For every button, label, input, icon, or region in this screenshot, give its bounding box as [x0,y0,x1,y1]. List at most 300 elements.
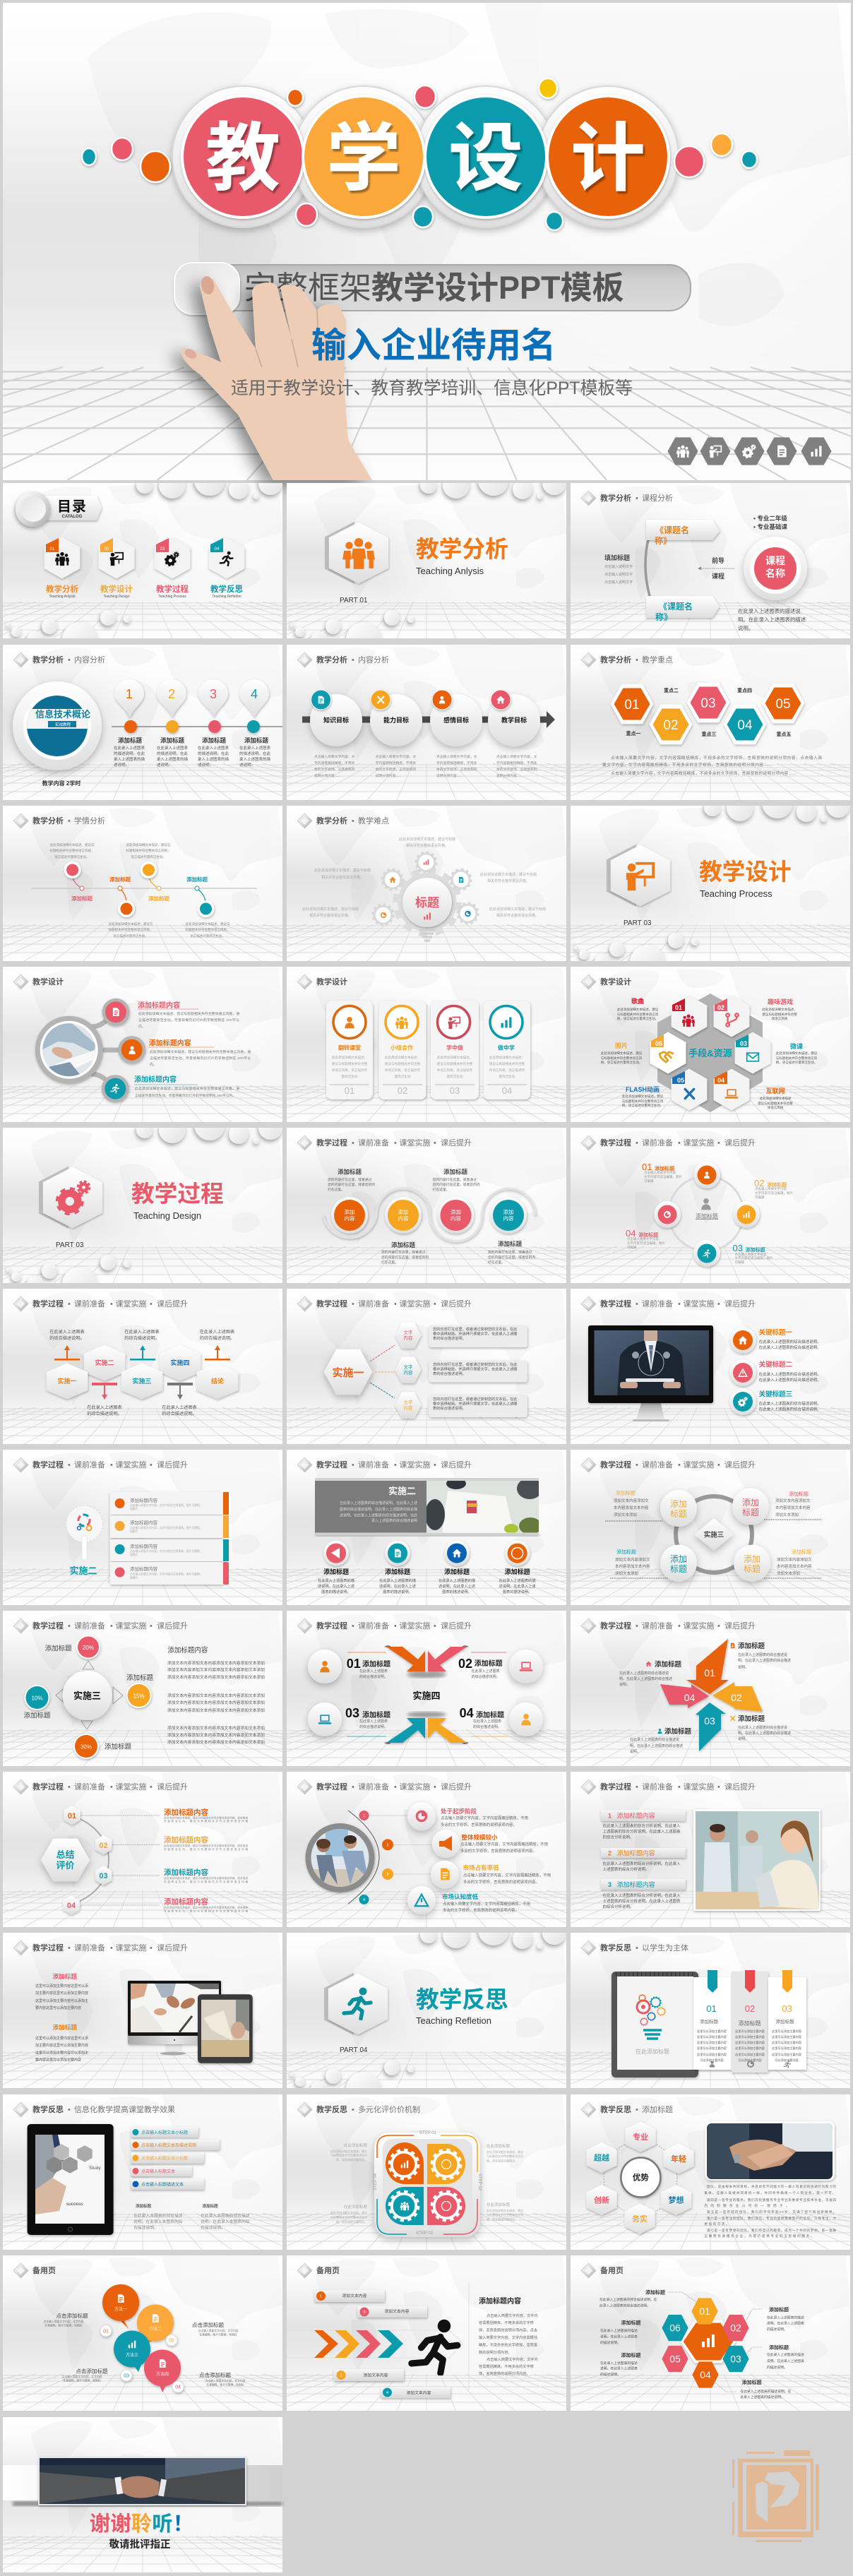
background [0,645,410,800]
thank you text: 谢谢聆听！ [90,2512,193,2536]
list item 4: 市场认知度低 [442,1893,479,1900]
slide header: • [636,1461,638,1469]
text bottom left: 添加文本内容添加文 [615,1556,650,1562]
resource descriptions: 格，语言描述尽量简洁生动。 [617,1016,658,1021]
slide header: • [352,817,354,825]
slide: implementation three percent [0,1611,410,1766]
hex 03: 03 [99,1872,108,1880]
key point labels: 重点二 [664,687,679,693]
slide header: • [434,1461,436,1469]
item text 3: 添加标题内容 [164,1868,208,1877]
arrow descriptions: 的综合描述说明。 [162,1411,197,1417]
card 1: 建议与标题相关并符合整 [332,1061,368,1066]
slide: cycle ring [443,1128,853,1283]
gear descriptions: 相关并符合整体语言风格。 [496,913,539,918]
label 04: 文字内容可适当编辑，图片 [627,1241,665,1246]
node bottom right: 标题 [744,1564,760,1574]
caption block 1: 添加标题 [136,2203,151,2209]
hex nodes: 超越 [594,2153,609,2163]
info card 2 [429,1360,527,1383]
right paragraphs: 添加文本内容添加文本内容添加文本内容添加文本添加 [167,1700,265,1705]
center diamond: 实施三 [704,1531,724,1539]
side captions right [487,2143,523,2222]
catalog item 3 [155,537,190,599]
column 2: 这里可以添加主要内容 [735,2040,765,2045]
item 03 [308,1703,390,1736]
slide header: 课前准备 [74,1943,105,1952]
hex 01: 01 [68,1812,76,1820]
slide header [13,2263,56,2278]
dashed ring [604,2141,677,2214]
column 2: 这里可以添加主要内容 [735,2029,765,2034]
column 1: 01 [706,2003,717,2014]
list item 3: 点击输入简要文字内容，文字内容需概括精炼，不用 [463,1873,551,1878]
label 02: 添加标题 [738,1715,765,1723]
node bottom right [734,1545,770,1582]
item text 4: 此处添加详细文本描述，建议与标题相关并符合整体语言风格，语言描述 [164,1905,248,1909]
item 04: 在此录入上述图表 [473,1719,501,1724]
slide: pinwheel arrows [443,1611,853,1766]
numbered dots [359,1811,393,1904]
list item 3: 上述图表的综合分析说明。在此录入上述图表 [603,1898,681,1904]
item text 1: 尽量简洁生动。建议与标题相关并符合整体语言风格 [164,1819,248,1823]
label 03: 点击输入简要文字内容, [734,1252,768,1257]
bullet list: • 专业二年级 [753,515,787,522]
paragraphs: 正确而优质服务企业，为客户提供专业的五星级的服务。 [705,2234,813,2238]
goal descriptions: 说明分项内容...... [496,773,523,778]
info card 2: 您的内容打在这里，或者通过复制您的文本后，在此 [433,1361,518,1367]
list row 3: 添加标题内容 [130,1543,158,1549]
hexagon 05 [762,684,804,723]
slide header: 教学分析 [600,656,631,664]
goal descriptions: 余的文字修饰，言简意赅的 [496,767,537,772]
number badges: 02 [169,2339,174,2343]
pin captions: 录入上述图表的描 [198,756,229,762]
label 03: 03 添加标题 [733,1243,765,1253]
summary hexagon: 评价 [56,1860,75,1871]
hexagon 01 [611,684,653,724]
slide header: • [678,1139,681,1147]
slide header: 课前准备 [358,1299,389,1308]
item text 4: 尽量简洁生动。建议与标题相关并符合整体语言风格 [164,1909,248,1912]
feature 3: 述说明。在此录入上述 [439,1583,475,1589]
paragraphs: 第四是一名专业的服务。我们的优质服务专业专业形象受专业技术水准，丰富四 [707,2198,836,2202]
node 2 [140,861,161,890]
slide header: 课前准备 [358,1782,389,1791]
paragraphs: 集体。这群人既被共同目标一样，共同条件确保一个人的业务，第一不可。 [705,2190,836,2195]
slide: course analysis [443,483,853,638]
slide header: 课堂实施 [684,1138,715,1147]
arrow descriptions: 在此录入上述图表 [87,1405,122,1410]
caption block 2: 说明。在此录入本图表的综 [201,2219,250,2224]
section hexagon [325,522,388,584]
catalog item 2: 教学设计 [100,584,133,594]
bubble caption 1: 任意编辑，图片可替换，纯图标 [44,2323,83,2327]
arrow descriptions [49,1329,234,1417]
slide header: • [68,1622,71,1630]
bullet list: • 专业基础课 [753,523,787,530]
info card 1: 您的内容打在这里，或者通过复制您的文本后，在此 [433,1326,518,1332]
title rings [172,86,679,227]
branch text teal: 言描述尽量简洁生动。尽量将每页幻灯片的字数控制在 200字以内。 [135,1093,236,1098]
step tag 2: 2 [340,2374,342,2378]
label 03: 添加标题 [664,1727,692,1736]
gear descriptions: 相关并符合整体语言风格。 [487,878,530,883]
slide header: 课后提升 [157,1943,188,1952]
card 2: 建议与标题相关并符合整 [385,1061,421,1066]
description blocks: 标题相关并符合整体语言风格， [109,927,153,932]
bubble caption 2: 任意编辑，图片可替换，纯图标 [199,2333,237,2336]
gray shadows [384,1645,469,1744]
list item 1: 1 [608,1812,612,1819]
slide header: 课后提升 [441,1621,472,1630]
hexagon 05: 05 [775,697,791,712]
background [0,1128,410,1283]
node 4 [195,886,215,917]
part label: PART 01 [340,597,368,604]
slide header: 教学设计 [316,977,347,986]
percent 30 [73,1734,99,1759]
side captions right: 格，语言描述尽量简洁。 [487,2158,518,2162]
center circle: 优势 [633,2172,649,2182]
slide: method cards [160,967,693,1122]
pin captions: 录入上述图表的描 [239,756,271,762]
hexagon 03: 03 [700,696,716,711]
notebook [612,1972,698,2077]
node 1 [64,861,84,890]
node labels: 添加标题 [186,876,208,883]
background [160,806,693,961]
background [443,967,853,1122]
item 03: 添加标题 [362,1710,390,1719]
text block 1: 加主要内容这里可以添加主要内容 [35,1991,88,1996]
hex 05 [672,1069,707,1110]
keyword 1: 在此录入上述图表的综合描述说明。 [759,1339,821,1344]
divider [108,1493,109,1584]
card 2: 此处添加详细文本描述， [385,1055,420,1060]
pin captions: 添加标题 [244,737,268,744]
slide: learner analysis timeline [0,806,410,961]
label 01: 在此录入上述图表的综合描述说 [738,1652,787,1657]
resource descriptions: 建议与标题相关并符合整 [758,1101,793,1106]
item 04: 04 [460,1706,474,1720]
background [0,483,410,638]
node bottom left: 添加 [670,1554,687,1564]
step labels: STEP 03 [416,2231,434,2236]
gear descriptions: 相关并符合整体语言风格。 [309,913,352,918]
text bottom left: 添加文本添加 [615,1570,638,1576]
card 1 [326,1001,373,1099]
column 3 [768,1970,806,2070]
gray core hexagon [657,994,763,1112]
step descriptions: 您的内容打在这里，或者通过 [488,1250,532,1254]
course name circle: 课程 [765,555,785,566]
slide: catalog [0,465,410,657]
label 01: 点击输入简要文字内容, [644,1170,676,1175]
text top right: 添加文本添加 [775,1512,799,1517]
column 2: 可以添加主要内容 [738,2058,762,2063]
prerequisite arrow: 课程 [712,572,724,580]
summary hexagon [41,1839,90,1881]
t-arrows down [92,1383,193,1400]
item 03: 03 [345,1706,359,1720]
slide header [581,1618,756,1633]
keyword 3: 在此录入上述图表的综合描述说明。 [759,1401,821,1407]
background [443,806,853,961]
list item 4 [407,1886,530,1914]
slide header: 课堂实施 [116,1460,147,1469]
label 01: 明。在此录入上述图表的综合描述 [738,1658,791,1663]
feature 4: 在此录入上述图表的描 [499,1578,536,1583]
slide header: 教学分析 [32,656,64,664]
part label: PART 03 [624,919,652,927]
hex 03 [735,1032,770,1073]
divider line [468,2283,470,2390]
step captions: 添加标题 [498,1240,522,1247]
banner panel: 实施二 [388,1486,416,1496]
background [443,1289,853,1444]
resource descriptions: 格，语言描述尽量简洁生动。 [622,1103,663,1108]
title circle: 学 [302,95,426,219]
slide header [13,1779,188,1794]
slide header: • [110,1783,113,1791]
hex 02: 02 [717,1004,724,1011]
feature 1: 添加标题 [323,1568,349,1575]
slide header: 备用页 [32,2265,56,2275]
slide header: 课堂实施 [400,1299,431,1308]
list row 4: 点击输入简要文字内容。文字内容应言简意赅。图片可替换。 [130,1572,203,1576]
goal descriptions: 字内容需概括精炼，不用多 [376,761,416,765]
pin captions: 的描述说明。在此 [198,751,229,756]
pin captions: 述说明。 [239,762,255,768]
label 01: 01 添加标题 [642,1162,674,1172]
resource titles: 互联网 [765,1087,785,1095]
slide header: • [110,1300,113,1308]
slide header: • [636,1139,638,1147]
title circle: 计 [546,95,670,219]
desktop monitor [128,1981,221,2055]
slide header: 课程分析 [642,493,673,503]
background [0,1450,410,1605]
node top left: 添加 [670,1499,687,1509]
small hex 1: 文字 [404,1329,413,1335]
step circle 3: 内容 [451,1215,461,1222]
slide header: 教学设计 [32,977,64,986]
paragraphs: 团队，是由根本共同目标、并且具有不同能力的一群人有意识的协调行为和力的 [707,2184,836,2189]
branch text red: 添加标题内容 [138,1001,180,1010]
goal circle 2 [370,690,422,746]
column 2: 这里可以添加主要内容 [735,2052,765,2057]
gear descriptions: 相关并符合整体语言风格。 [406,843,448,848]
catalog item 3: 教学过程 [156,584,189,594]
arrow descriptions: 的综合描述说明。 [49,1335,85,1341]
bubble 4 [144,2350,181,2392]
goal descriptions: 点击输入简要文字内容，文 [496,754,537,759]
resource descriptions: 与标题相关并符合整体语言风 [622,1099,664,1104]
goal descriptions: 点击输入简要文字内容，文 [314,754,355,759]
rounded frame [374,2133,480,2237]
slide header: • [636,1783,638,1791]
card 2: 量简洁生动 [395,1074,411,1079]
slide header [13,974,64,989]
label 01: 添加标题 [738,1642,765,1650]
slide header: 课堂实施 [116,1621,147,1630]
label 02: 明。在此录入上述图表的综合描述 [738,1731,791,1736]
numbered dots: 4 [363,1898,365,1902]
paragraph: 点击输入简要文字内容，文字内容需概括精炼，不用多余的文字修饰，言简意赅的说明分项内容...... [611,770,796,776]
slide header: • [394,1300,397,1308]
resource descriptions: 此处添加详细文本描述。建议 [622,1094,664,1099]
background [443,1933,853,2088]
description [738,608,806,631]
bottom course tag [646,596,720,622]
resource descriptions [601,1007,818,1110]
item text 2: 尽量简洁生动。建议与标题相关并符合整体语言风格 [164,1847,248,1851]
slide header: 备用页 [600,2265,624,2275]
arrow descriptions: 在此录入上述图表 [124,1329,160,1335]
column 3: 可以添加主要内容 [775,2058,799,2063]
arc connector [645,527,652,603]
caption block 2 [201,2203,250,2230]
percent 10: 10% [31,1695,43,1702]
text top right [764,1491,821,1520]
percent labels: 添加标题 [45,1644,72,1652]
step circle 3: 添加 [451,1208,461,1215]
callout 3: 的描述说明。 [600,2340,621,2345]
label 04 [619,1660,682,1687]
item 02: 02 [458,1657,472,1671]
background [0,1772,410,1927]
slide: implementation two banner [287,1450,566,1605]
small hex 2 [395,1356,422,1383]
bottom course tag: 《课题名 [659,601,693,612]
slide header: • [636,2106,638,2114]
feature 2: 述说明。在此录入上述 [379,1583,416,1589]
tag 4 [131,2166,192,2176]
right paragraphs: 添加文本内容添加文本内容添加文本内容添加文本添加 [167,1707,265,1713]
slide header: • [110,1622,113,1630]
slide header: 课堂实施 [400,1460,431,1469]
resource descriptions: 此处添加详细文本描述， [762,1007,797,1012]
gear descriptions: 此处添加详细文本描述，建议与标题 [314,868,371,873]
slide header: 备用页 [316,2265,340,2275]
banner shadow [315,1533,539,1535]
background [160,2094,693,2250]
right title: 添加标题内容 [167,1646,208,1654]
step tag 1 [314,2290,385,2302]
side captions right: 在此添加标题 [487,2143,511,2149]
catalog item 4: Teaching Refletion [212,595,241,599]
tag 1 [131,2127,198,2137]
key point labels: 重点四 [737,687,752,693]
core label: 手段&资源 [688,1048,732,1059]
info card 1 [429,1325,527,1347]
teamwork photo [705,2121,835,2181]
hex 04: 04 [67,1902,76,1910]
item text 4 [164,1897,248,1912]
bubble 1 [102,2284,139,2329]
branch node red [102,998,130,1026]
step circle 4: 添加 [503,1208,514,1215]
goal descriptions: 余的文字修饰，言简意赅的 [376,767,416,772]
goal descriptions: 说明分项内容...... [314,773,340,778]
left text: 点击输入说明文字 [604,564,633,569]
paragraphs: 第五是一是年轻的团队。我们的平均年龄20岁，充满了智气和创新精神。 [707,2210,836,2214]
list item 1: 点击输入简要文字内容，文字内容需概括精炼，不用 [441,1815,528,1820]
paragraph: 点击输入简要文字内容，文字内容需概括精炼，不用多余的文字修饰，言简意赅的说明分项内容，点击输入简 [611,755,822,761]
list item 3: 的综合分析说明。 [603,1904,634,1909]
callout 2: 添加标题 [769,2306,789,2313]
step tag 2: 添加文本内容 [364,2373,388,2378]
handshake photo [38,2457,246,2505]
node top right: 添加 [742,1498,759,1508]
tree label: 实施二 [69,1566,97,1576]
small hex 3 [395,1392,422,1419]
slide header: 内容分析 [358,655,389,664]
slide header: 课后提升 [441,1138,472,1147]
bubble 3: 方法三 [126,2352,138,2358]
info card 3 [429,1395,527,1417]
step descriptions: 打在这里。 [328,1187,345,1192]
step circle 3 [438,1197,475,1234]
text top right: 添加文本内容添加文 [775,1498,811,1503]
main hexagon [324,1349,372,1395]
slide header: • [150,1461,153,1469]
item 03: 的综合描述说明。 [359,1724,388,1729]
keyword 3: 关键标题三 [759,1390,792,1398]
branch text red: 内。 [138,1024,145,1029]
catalog tag: CATALOG [62,515,83,519]
pin 1: 1 [126,687,133,701]
title circle: 设 [424,95,548,219]
center circle: 实施三 [73,1690,101,1701]
slide header: • [68,656,71,664]
label 03 [630,1727,692,1754]
hex 06 [650,1032,686,1073]
slide header: 内容分析 [74,655,105,664]
right paragraphs: 添加文本内容添加文本内容添加文本内容添加文本添加 [167,1739,265,1745]
hex 02: 02 [99,1842,108,1850]
keyword 1: 关键标题一 [759,1328,793,1337]
callout 2: 说明。在此录入上述图表 [767,2320,804,2326]
side captions left: 此处添加详细文本描述。建议 [330,2149,367,2153]
list item 2 [432,1830,548,1858]
text block 1: 添加标题 [52,1972,77,1980]
node bottom left [660,1545,697,1582]
arrow teal [386,1718,425,1743]
slide header: 教学分析 [32,817,64,825]
center person [696,1198,718,1220]
card 1: 体语言风格，语言描述尽 [332,1068,368,1073]
arrow 04: 04 [684,1692,695,1703]
callout 1: 此录入上述图表的综合描述说明。 [600,2303,650,2308]
center person: 添加标题 [696,1212,718,1220]
background [443,645,853,800]
card 2: 02 [398,1085,407,1096]
text top left [605,1490,662,1521]
bubble 2 [137,2305,174,2346]
right title: 添加标题内容 [479,2296,521,2306]
branch text red [138,1001,239,1029]
node top left [660,1490,697,1527]
slide header: • [150,1944,153,1952]
right paragraph: 输入简要文字内容。文字内容需概括 [479,2334,537,2340]
slide: section teaching analysis [160,465,693,657]
pin 4: 4 [251,687,258,701]
slide header: • [68,817,71,825]
text bottom left: 本内容添加文本内容 [615,1563,650,1569]
description blocks: 语言描述尽量简洁生动。 [131,854,166,859]
